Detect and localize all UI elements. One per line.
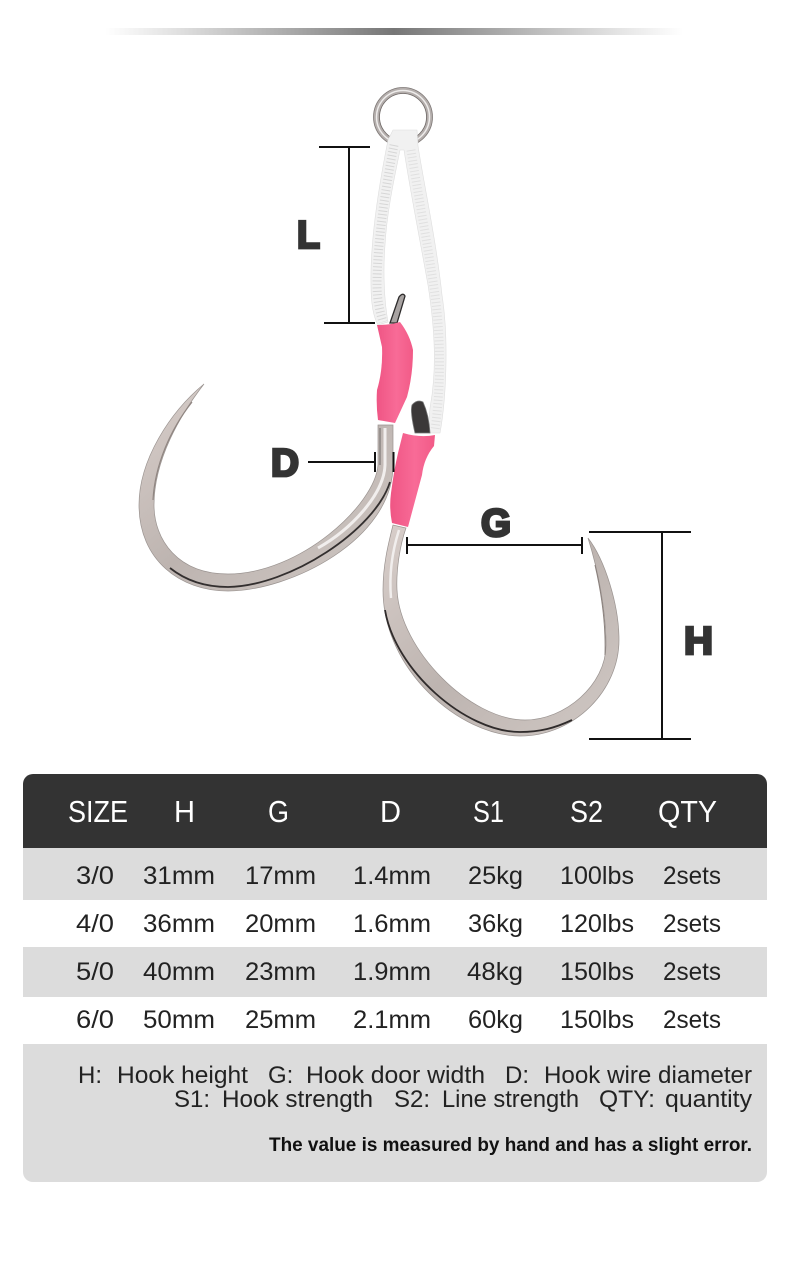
legend panel: Hook height bbox=[117, 1062, 248, 1089]
row 5/0: 48kg bbox=[467, 958, 523, 986]
dimension D: D bbox=[271, 442, 299, 485]
legend panel: D: bbox=[505, 1062, 529, 1089]
legend panel: Line strength bbox=[442, 1086, 579, 1113]
dimension L: L bbox=[297, 214, 320, 257]
left hook bbox=[139, 384, 393, 591]
dimension L bbox=[297, 147, 375, 323]
row 4/0: 36kg bbox=[468, 910, 523, 938]
table header bbox=[23, 774, 767, 848]
row 4/0: 120lbs bbox=[560, 910, 634, 938]
row 4/0: 20mm bbox=[245, 910, 316, 938]
table header: S1 bbox=[473, 794, 504, 829]
row 5/0: 40mm bbox=[143, 958, 215, 986]
row 6/0: 2sets bbox=[663, 1006, 721, 1034]
legend panel: QTY: bbox=[599, 1086, 655, 1113]
row 3/0: 17mm bbox=[245, 862, 316, 890]
row 5/0: 150lbs bbox=[560, 958, 634, 986]
row 6/0: 150lbs bbox=[560, 1006, 634, 1034]
upper pink thread wrap bbox=[377, 322, 413, 423]
dimension H: H bbox=[684, 620, 713, 663]
row 4/0: 2sets bbox=[663, 910, 721, 938]
table header: G bbox=[268, 794, 289, 829]
row 3/0: 100lbs bbox=[560, 862, 634, 890]
dimension G bbox=[407, 502, 582, 554]
legend panel: S2: bbox=[394, 1086, 430, 1113]
right hook bbox=[383, 525, 619, 736]
row 6/0 bbox=[23, 997, 767, 1044]
legend panel: S1: bbox=[174, 1086, 210, 1113]
table header: H bbox=[174, 794, 195, 829]
legend panel: Hook strength bbox=[222, 1086, 373, 1113]
row 3/0: 25kg bbox=[468, 862, 523, 890]
row 4/0 bbox=[23, 900, 767, 947]
row 6/0: 50mm bbox=[143, 1006, 215, 1034]
table header: D bbox=[380, 794, 401, 829]
row 3/0: 2sets bbox=[663, 862, 721, 890]
row 3/0: 1.4mm bbox=[353, 862, 431, 890]
row 4/0: 1.6mm bbox=[353, 910, 431, 938]
legend panel: H: bbox=[78, 1062, 102, 1089]
legend panel: quantity bbox=[665, 1086, 752, 1113]
legend panel: Hook door width bbox=[306, 1062, 485, 1089]
legend panel: G: bbox=[268, 1062, 293, 1089]
legend panel: The value is measured by hand and has a slight error. bbox=[269, 1135, 752, 1156]
split ring bbox=[374, 88, 432, 146]
row 3/0: 3/0 bbox=[76, 862, 114, 890]
row 6/0: 60kg bbox=[468, 1006, 523, 1034]
legend panel: Hook wire diameter bbox=[544, 1062, 752, 1089]
row 4/0: 36mm bbox=[143, 910, 215, 938]
row 6/0: 6/0 bbox=[76, 1006, 114, 1034]
hook eye upper bbox=[390, 294, 405, 323]
row 5/0: 2sets bbox=[663, 958, 721, 986]
top gradient bar bbox=[105, 28, 683, 35]
row 3/0: 31mm bbox=[143, 862, 215, 890]
row 5/0: 5/0 bbox=[76, 958, 114, 986]
table header: SIZE bbox=[68, 794, 128, 829]
row 5/0: 1.9mm bbox=[353, 958, 431, 986]
dimension H bbox=[589, 532, 713, 739]
white braided assist cord bbox=[371, 130, 446, 433]
row 6/0: 2.1mm bbox=[353, 1006, 431, 1034]
dimension D bbox=[271, 442, 394, 485]
legend panel bbox=[23, 1044, 767, 1182]
hook product illustration bbox=[139, 88, 619, 736]
row 5/0: 23mm bbox=[245, 958, 316, 986]
specification table bbox=[23, 774, 767, 1182]
row 4/0: 4/0 bbox=[76, 910, 114, 938]
row 3/0 bbox=[23, 848, 767, 900]
row 6/0: 25mm bbox=[245, 1006, 316, 1034]
hook eye lower bbox=[411, 401, 430, 433]
row 5/0 bbox=[23, 947, 767, 997]
dimension G: G bbox=[481, 502, 511, 545]
table header: QTY bbox=[658, 794, 717, 829]
table header: S2 bbox=[570, 794, 603, 829]
lower pink thread wrap bbox=[390, 433, 435, 527]
